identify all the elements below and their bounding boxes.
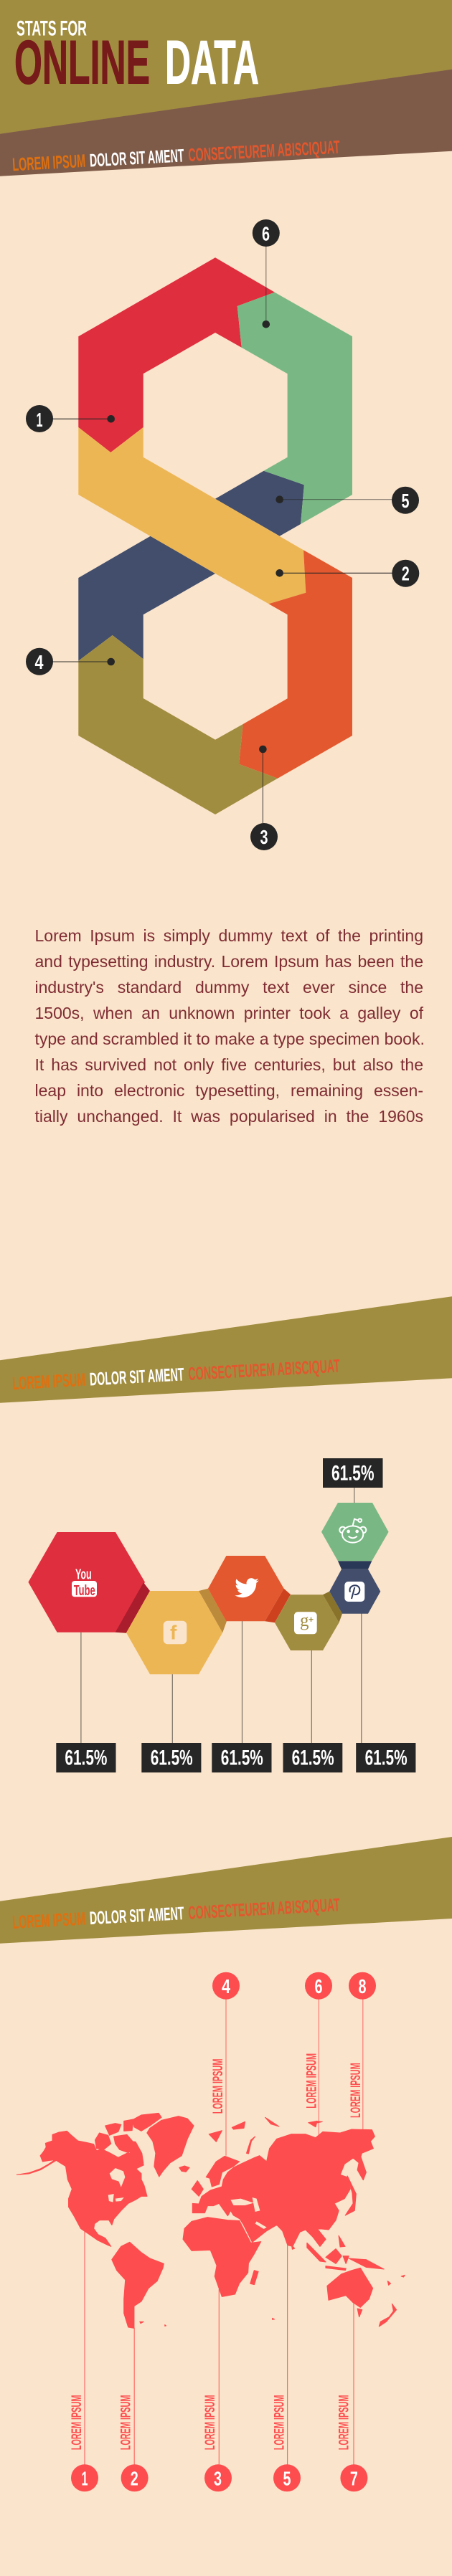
google plus hexagon: +: [309, 1615, 314, 1625]
callout 6: [253, 219, 280, 328]
section 3 banner: DOLOR SIT AMENT: [89, 1904, 185, 1929]
map pin 4: [211, 1972, 240, 2156]
map pin 6: LOREM IPSUM: [305, 2053, 320, 2109]
value label facebook: 61.5%: [151, 1746, 193, 1770]
segment 2 yellow: [78, 427, 306, 604]
section 2 banner: [0, 1296, 452, 1403]
header subtitle: LOREM IPSUM: [12, 151, 86, 175]
africa: [183, 2218, 261, 2296]
value label youtube: [56, 1743, 116, 1772]
north america: [17, 2131, 147, 2246]
world map: [17, 2113, 405, 2328]
title: data: DATA: [165, 29, 259, 98]
value label top: [323, 1458, 383, 1488]
map pin 8: 8: [359, 1975, 366, 1997]
youtube hexagon: [28, 1532, 150, 1633]
arctic islands: [209, 2117, 322, 2154]
title: online: ONLINE: [14, 29, 150, 98]
callout 6: 6: [262, 222, 270, 245]
segment 1 red: [78, 257, 275, 452]
segment 5 navy upper: [215, 471, 304, 536]
social hexagon chart: [28, 1458, 415, 1772]
map pin 2: [119, 2328, 149, 2491]
header subtitle: DOLOR SIT AMENT: [89, 146, 185, 171]
value label facebook: [141, 1743, 201, 1772]
map pin 4: 4: [222, 1975, 230, 1997]
value label google plus: 61.5%: [292, 1746, 334, 1770]
header subtitle: [12, 138, 341, 175]
madagascar: [250, 2271, 258, 2285]
map pin 3: 3: [214, 2468, 222, 2489]
scandinavia: [206, 2156, 239, 2187]
map pin 4: LOREM IPSUM: [211, 2059, 226, 2114]
body paragraph: type and scrambled it to make a type specimen book.: [34, 1030, 425, 1048]
segment 4 navy lower: [78, 536, 215, 661]
value label pinterest: 61.5%: [365, 1746, 408, 1770]
map pin 3: [203, 2289, 232, 2491]
reddit hexagon: [321, 1503, 389, 1569]
youtube hexagon: You: [75, 1567, 92, 1583]
map pin 5: [273, 2245, 301, 2491]
google plus hexagon: [275, 1592, 342, 1650]
body paragraph: [34, 926, 425, 1126]
callout 5: [276, 487, 419, 514]
hexagon figure eight chart: [26, 219, 419, 850]
youtube hexagon: Tube: [74, 1583, 95, 1599]
map pin 6: [305, 1972, 332, 2135]
body paragraph: and typesetting industry. Lorem Ipsum has been the: [34, 952, 423, 971]
section 2 banner: LOREM IPSUM: [12, 1370, 86, 1394]
body paragraph: Lorem Ipsum is simply dummy text of the printing: [34, 926, 423, 945]
callout 4: 4: [34, 651, 44, 673]
map pin 7: [337, 2303, 367, 2491]
body paragraph: 1500s, when an unknown printer took a galley of: [34, 1004, 423, 1022]
callout 1: [26, 405, 115, 432]
australia: [327, 2268, 373, 2317]
map pin 1: 1: [82, 2468, 88, 2489]
map pin 2: LOREM IPSUM: [119, 2395, 134, 2450]
small islands: [140, 2275, 405, 2326]
value label google plus: [283, 1743, 342, 1772]
canadian arctic islands: [95, 2113, 161, 2163]
callout 3: [250, 746, 278, 850]
callout 2: [276, 560, 419, 587]
inland seas: [219, 2171, 267, 2229]
map pin 7: 7: [350, 2468, 358, 2489]
value label top: 61.5%: [331, 1461, 375, 1485]
map pin 5: LOREM IPSUM: [273, 2395, 288, 2450]
pinterest hexagon: [329, 1569, 380, 1614]
value label pinterest: [356, 1743, 415, 1772]
map pin 8: LOREM IPSUM: [349, 2063, 364, 2118]
google plus hexagon: g: [300, 1611, 309, 1630]
segment olive: [78, 635, 278, 814]
body paragraph: industry's standard dummy text ever since the: [34, 978, 423, 997]
twitter hexagon: [208, 1556, 291, 1622]
greenland: [147, 2116, 194, 2177]
callout 5: 5: [402, 490, 409, 512]
segment 3 orange: [239, 550, 352, 779]
value label twitter: 61.5%: [221, 1746, 263, 1770]
facebook hexagon: f: [170, 1622, 177, 1644]
map pin 6: 6: [314, 1975, 323, 1997]
map pin 2: 2: [131, 2468, 138, 2489]
body paragraph: It has survived not only five centuries, but also the: [34, 1055, 423, 1074]
japan and sakhalin: [345, 2156, 366, 2215]
callout 3: 3: [260, 826, 268, 848]
map pin 7: LOREM IPSUM: [337, 2395, 352, 2450]
map pin 5: 5: [283, 2468, 291, 2489]
new zealand: [379, 2304, 396, 2327]
map pin 8: [349, 1972, 376, 2129]
segment 6 green: [237, 293, 352, 524]
header panel: [0, 0, 452, 176]
callout 4: [26, 648, 115, 675]
british isles: [192, 2181, 203, 2196]
hudson bay and great lakes: [108, 2168, 125, 2202]
callout 2: 2: [402, 563, 410, 585]
section 3 banner: LOREM IPSUM: [12, 1909, 86, 1933]
south america: [112, 2242, 164, 2328]
map pin 3: LOREM IPSUM: [203, 2395, 218, 2450]
value label youtube: 61.5%: [65, 1746, 107, 1770]
southeast asia islands: [292, 2235, 384, 2271]
callout 1: 1: [36, 409, 43, 431]
map pin 1: [70, 2228, 98, 2491]
eurasia: [192, 2129, 375, 2246]
map pin 1: LOREM IPSUM: [70, 2395, 85, 2450]
value label twitter: [212, 1743, 271, 1772]
body paragraph: tially unchanged. It was popularised in the 1960s: [34, 1107, 423, 1126]
section 2 banner: DOLOR SIT AMENT: [89, 1364, 185, 1389]
facebook hexagon: [126, 1589, 227, 1674]
iceland: [179, 2166, 189, 2172]
body paragraph: leap into electronic typesetting, remaining essen-: [34, 1081, 423, 1100]
title: stats for: STATS FOR: [17, 16, 87, 40]
section 3 banner: [0, 1837, 452, 1944]
